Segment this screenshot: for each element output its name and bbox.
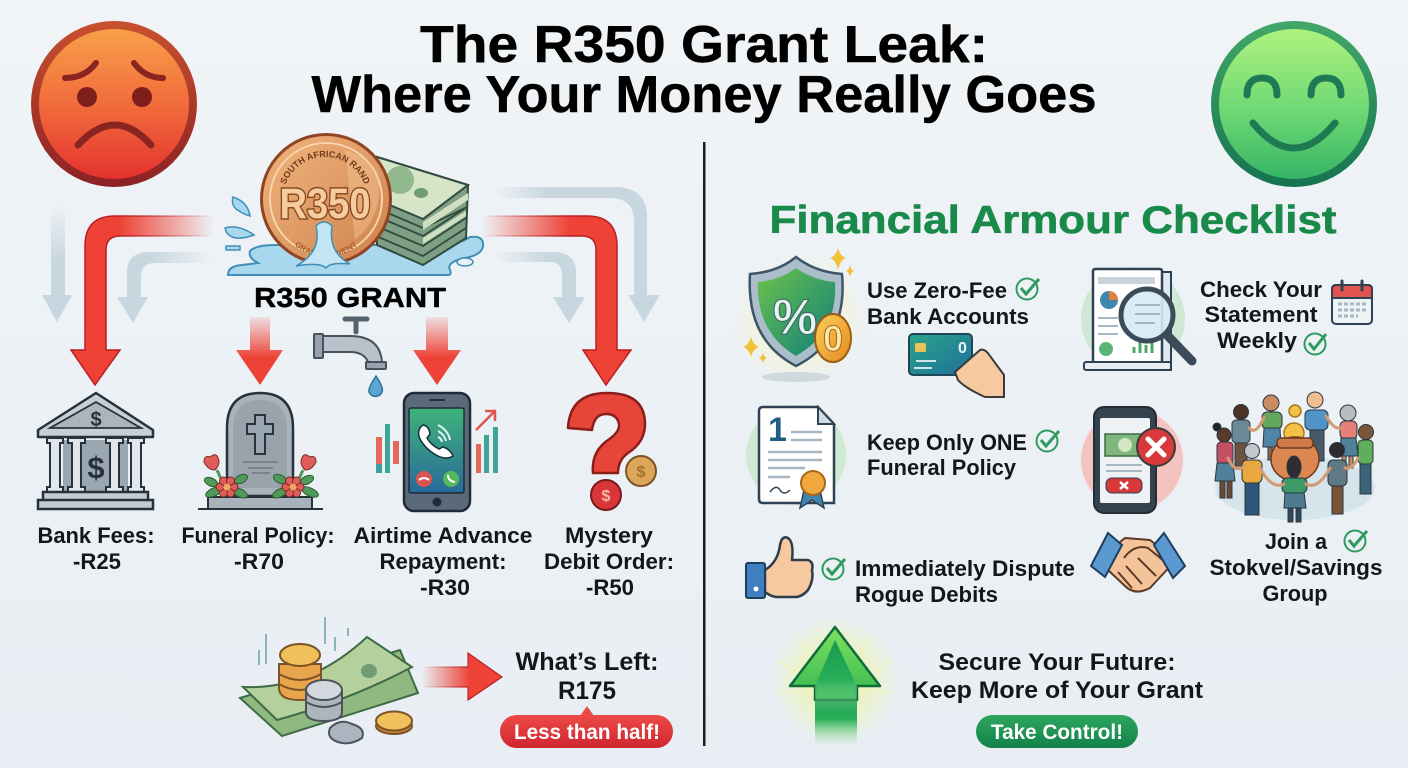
label: airtime advance repayment: Airtime Advance — [354, 523, 532, 548]
icon: bank — [38, 393, 153, 509]
panel: financial armour checklist — [732, 199, 1382, 748]
arrow: to what's left — [422, 653, 502, 700]
icon: question mark with coins — [568, 393, 656, 510]
label: airtime advance repayment: -R30 — [420, 575, 470, 600]
red arrow: to bank fees — [71, 216, 214, 385]
title — [312, 16, 1096, 124]
title: Where Your Money Really Goes — [312, 66, 1096, 124]
label: secure your future: Keep More of Your Grant — [911, 677, 1203, 704]
title: The R350 Grant Leak: — [420, 16, 988, 74]
icon: bank: $ — [87, 450, 105, 485]
divider — [703, 142, 706, 746]
icon: card in hand: 0 — [958, 340, 967, 357]
coin: SOUTH AFRICAN RAND — [280, 150, 370, 184]
icon: tombstone — [198, 393, 323, 509]
icon: sad face — [31, 21, 197, 187]
red arrow: to airtime — [413, 317, 461, 385]
pale arrow: inner left — [117, 252, 212, 323]
icon: remaining cash and coins — [240, 617, 418, 743]
arrow: green up arrow — [771, 616, 899, 747]
icon: bank: $ — [90, 409, 102, 431]
item: one funeral policy: Keep Only ONE — [867, 430, 1027, 455]
item: join a stokvel: Join a — [1265, 529, 1328, 554]
label: funeral policy: Funeral Policy: — [182, 523, 334, 548]
item: check statement: Statement — [1204, 302, 1318, 327]
icon: phone with airtime graph — [376, 393, 498, 511]
item: check statement: Weekly — [1217, 328, 1298, 353]
savings pot with coin — [1271, 405, 1319, 481]
person front row — [1242, 442, 1347, 522]
check: dispute — [822, 558, 845, 580]
callout: less than half — [500, 706, 673, 748]
coin — [260, 133, 392, 262]
label: funeral policy: -R70 — [234, 549, 284, 574]
icon: thumbs up — [746, 537, 812, 598]
label: airtime advance repayment — [354, 523, 532, 600]
item: join a stokvel: Stokvel/Savings — [1210, 555, 1382, 580]
icon: question mark with coins: $ — [602, 488, 611, 505]
red arrow: to funeral policy — [236, 317, 283, 385]
pale arrow: far right — [495, 187, 660, 322]
item: zero-fee accounts: Use Zero-Fee — [867, 278, 1007, 303]
coin: GRANT PAYMENT — [296, 241, 356, 255]
pale arrow: inner right — [493, 252, 585, 323]
icon: handshake — [1091, 533, 1185, 592]
label: airtime advance repayment: Repayment: — [380, 549, 506, 574]
icon: zero percent shield: % — [773, 289, 817, 345]
label: funeral policy — [182, 523, 334, 574]
icon: single policy document: 1 — [768, 411, 787, 449]
label: mystery debit order: Debit Order: — [544, 549, 674, 574]
label: mystery debit order: -R50 — [586, 575, 634, 600]
label: what's left: What’s Left: — [516, 648, 658, 676]
puddle — [228, 237, 483, 275]
splash drops — [225, 197, 254, 250]
check: stokvel — [1344, 530, 1367, 552]
person back row — [1213, 392, 1374, 498]
heading: Financial Armour Checklist — [770, 199, 1337, 242]
item: dispute rogue debits: Rogue Debits — [855, 582, 998, 607]
icon: leaking tap — [314, 319, 386, 396]
banknote stack — [376, 157, 468, 265]
icon: happy face — [1211, 21, 1377, 187]
coin: R350 — [280, 180, 370, 228]
icon: phone with rejected debit — [1081, 407, 1183, 513]
icon: wet R350 coin and banknotes — [224, 133, 484, 276]
check: funeral policy — [1036, 430, 1059, 452]
red arrow: to mystery debit order — [482, 216, 631, 385]
check: zero-fee — [1016, 278, 1039, 300]
item: join a stokvel: Group — [1262, 581, 1328, 606]
callout: take control — [976, 715, 1138, 748]
callout: take control: Take Control! — [991, 721, 1123, 744]
label: R350 grant: R350 GRANT — [254, 282, 446, 313]
item: zero-fee accounts — [867, 278, 1029, 329]
item: check statement: Check Your — [1200, 277, 1322, 302]
icon: zero percent shield: 0 — [823, 318, 843, 359]
icon: question mark with coins: $ — [637, 464, 646, 481]
check: statement — [1304, 334, 1326, 354]
item: dispute rogue debits: Immediately Dispute — [855, 556, 1075, 581]
label: bank fees: Bank Fees: — [38, 523, 154, 548]
icon: calendar — [1332, 281, 1372, 324]
label: mystery debit order: Mystery — [565, 523, 654, 548]
icon: statement under magnifier — [1081, 267, 1192, 371]
panel: the leak — [36, 133, 674, 748]
item: one funeral policy: Funeral Policy — [867, 455, 1017, 480]
icon: stokvel circle of people — [1213, 392, 1375, 522]
label: bank fees: -R25 — [73, 549, 121, 574]
item: join a stokvel — [1210, 529, 1382, 606]
label: secure your future — [911, 649, 1203, 704]
icon: single policy document — [746, 405, 846, 508]
pale arrow: far left — [42, 203, 72, 322]
label: secure your future: Secure Your Future: — [938, 649, 1176, 676]
item: dispute rogue debits — [855, 556, 1075, 607]
label: mystery debit order — [544, 523, 674, 600]
label: what's left — [516, 648, 658, 705]
item: zero-fee accounts: Bank Accounts — [867, 304, 1029, 329]
item: one funeral policy — [867, 430, 1027, 480]
icon: zero percent shield — [732, 248, 868, 388]
callout: less than half: Less than half! — [514, 721, 660, 744]
icon: card in hand — [909, 334, 1004, 397]
item: check statement — [1200, 277, 1322, 353]
label: what's left: R175 — [558, 677, 616, 705]
water stream — [296, 222, 350, 268]
label: bank fees — [38, 523, 154, 574]
